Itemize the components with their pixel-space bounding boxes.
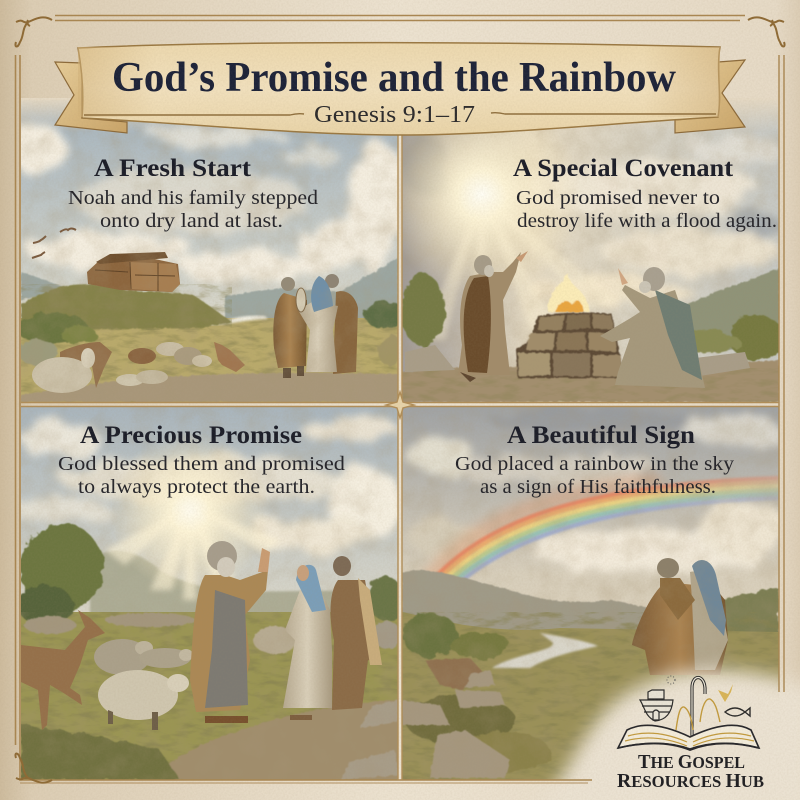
standing man praying bbox=[458, 251, 528, 382]
woman in blue veil bbox=[283, 565, 332, 720]
centre ornament bbox=[386, 392, 414, 418]
body: God blessed them and promised bbox=[58, 453, 345, 475]
altar fire bbox=[548, 273, 590, 312]
text: a beautiful sign bbox=[455, 422, 734, 498]
title: God’s Promise and the Rainbow bbox=[112, 55, 677, 101]
icon: dots bbox=[667, 676, 675, 684]
top fade into parchment bbox=[21, 98, 779, 132]
panel: a beautiful sign bbox=[402, 407, 790, 780]
rainbow glow bbox=[412, 482, 660, 606]
sun rays bbox=[105, 432, 280, 600]
corner ornament top right bbox=[748, 17, 785, 46]
grass texture bbox=[21, 318, 398, 402]
kneeling man bbox=[600, 267, 705, 388]
body: to always protect the earth. bbox=[78, 476, 315, 498]
text: a fresh start bbox=[68, 155, 318, 232]
corner ornament top left bbox=[15, 17, 52, 46]
left shrubs bbox=[402, 613, 550, 772]
title banner bbox=[55, 43, 745, 135]
ribbon flourishes bbox=[84, 113, 716, 115]
body: destroy life with a flood again. bbox=[517, 210, 777, 232]
couple viewing the rainbow bbox=[632, 558, 728, 675]
mountains bbox=[89, 550, 370, 612]
heading: A Fresh Start bbox=[94, 155, 252, 182]
ground bbox=[21, 318, 398, 402]
body: God placed a rainbow in the sky bbox=[455, 453, 734, 475]
clouds bbox=[10, 418, 403, 551]
body: God promised never to bbox=[516, 187, 720, 209]
meadow texture bbox=[21, 612, 398, 780]
clouds bbox=[399, 134, 783, 304]
icon: dove bbox=[718, 684, 733, 702]
foreground path bbox=[21, 373, 398, 402]
clouds bbox=[10, 124, 410, 283]
panel: a special covenant bbox=[402, 106, 778, 402]
sky bbox=[21, 103, 398, 318]
body: as a sign of His faithfulness. bbox=[480, 476, 716, 498]
mountains bbox=[402, 570, 660, 640]
logo text: THE GOSPEL bbox=[638, 751, 748, 773]
man in brown bbox=[331, 556, 382, 710]
stone altar bbox=[516, 313, 625, 378]
logo: the gospel resources hub bbox=[617, 676, 764, 792]
river bbox=[205, 316, 268, 325]
icon: staff highlight bbox=[692, 678, 705, 738]
sky mottling bbox=[410, 126, 778, 366]
distant mountains bbox=[21, 258, 398, 318]
left tail bbox=[55, 62, 127, 133]
icon: shepherd staff bbox=[692, 678, 705, 738]
painterly mottling bbox=[21, 100, 398, 402]
subtitle: Genesis 9:1–17 bbox=[314, 102, 475, 128]
sky bbox=[21, 407, 398, 612]
clouds bbox=[405, 408, 790, 572]
painterly mottling bbox=[402, 407, 779, 780]
icon: ark bbox=[640, 690, 673, 721]
text: a special covenant bbox=[513, 155, 777, 232]
sky bbox=[402, 100, 779, 402]
Noah blessing bbox=[190, 541, 270, 723]
heading: A Beautiful Sign bbox=[507, 422, 695, 449]
right tail bbox=[675, 60, 745, 133]
foliage and shrubs bbox=[16, 301, 405, 366]
family of Noah bbox=[273, 274, 358, 378]
land mottling bbox=[21, 612, 398, 780]
sky mottling bbox=[21, 407, 397, 590]
body: Noah and his family stepped bbox=[68, 187, 318, 209]
icon: gold figures bbox=[676, 699, 720, 730]
logo text: RESOURCES HUB bbox=[617, 770, 764, 792]
heading: A Special Covenant bbox=[513, 155, 734, 182]
valley land bbox=[402, 612, 779, 780]
valley texture bbox=[402, 612, 779, 780]
corner ornament bottom left bbox=[15, 754, 52, 783]
rocks and animal bbox=[402, 658, 510, 778]
panel: a precious promise bbox=[10, 407, 403, 780]
meadow bbox=[21, 612, 398, 780]
ground bbox=[402, 360, 779, 402]
sheep bbox=[94, 639, 193, 730]
banner body bbox=[78, 43, 720, 135]
hill texture bbox=[21, 284, 232, 330]
heading: A Precious Promise bbox=[80, 422, 302, 449]
animals bbox=[32, 342, 245, 393]
hills bbox=[686, 268, 778, 350]
distant flock bbox=[24, 613, 401, 654]
deer bbox=[21, 610, 105, 730]
stones bbox=[340, 700, 398, 780]
winding river bbox=[492, 633, 598, 668]
ark hill bbox=[21, 284, 232, 330]
rainbow bbox=[410, 478, 779, 620]
body: onto dry land at last. bbox=[100, 210, 283, 232]
ground texture bbox=[402, 368, 779, 402]
tree bbox=[17, 524, 403, 625]
foreground grass bbox=[21, 725, 180, 780]
trees bbox=[401, 274, 785, 360]
right hills bbox=[720, 588, 779, 660]
ark bbox=[87, 252, 180, 292]
sun glow and rays bbox=[402, 132, 606, 342]
icon: open book bbox=[618, 725, 759, 750]
panel: a fresh start bbox=[10, 100, 410, 402]
central cross divider bbox=[21, 134, 779, 780]
icon: fish bbox=[725, 708, 750, 716]
rocks bbox=[405, 345, 750, 376]
parchment fade for logo bbox=[535, 670, 800, 800]
banner edge shading bbox=[78, 47, 720, 117]
dirt path bbox=[150, 700, 398, 780]
birds bbox=[32, 228, 76, 258]
sky bbox=[402, 407, 779, 780]
text: a precious promise bbox=[58, 422, 345, 498]
